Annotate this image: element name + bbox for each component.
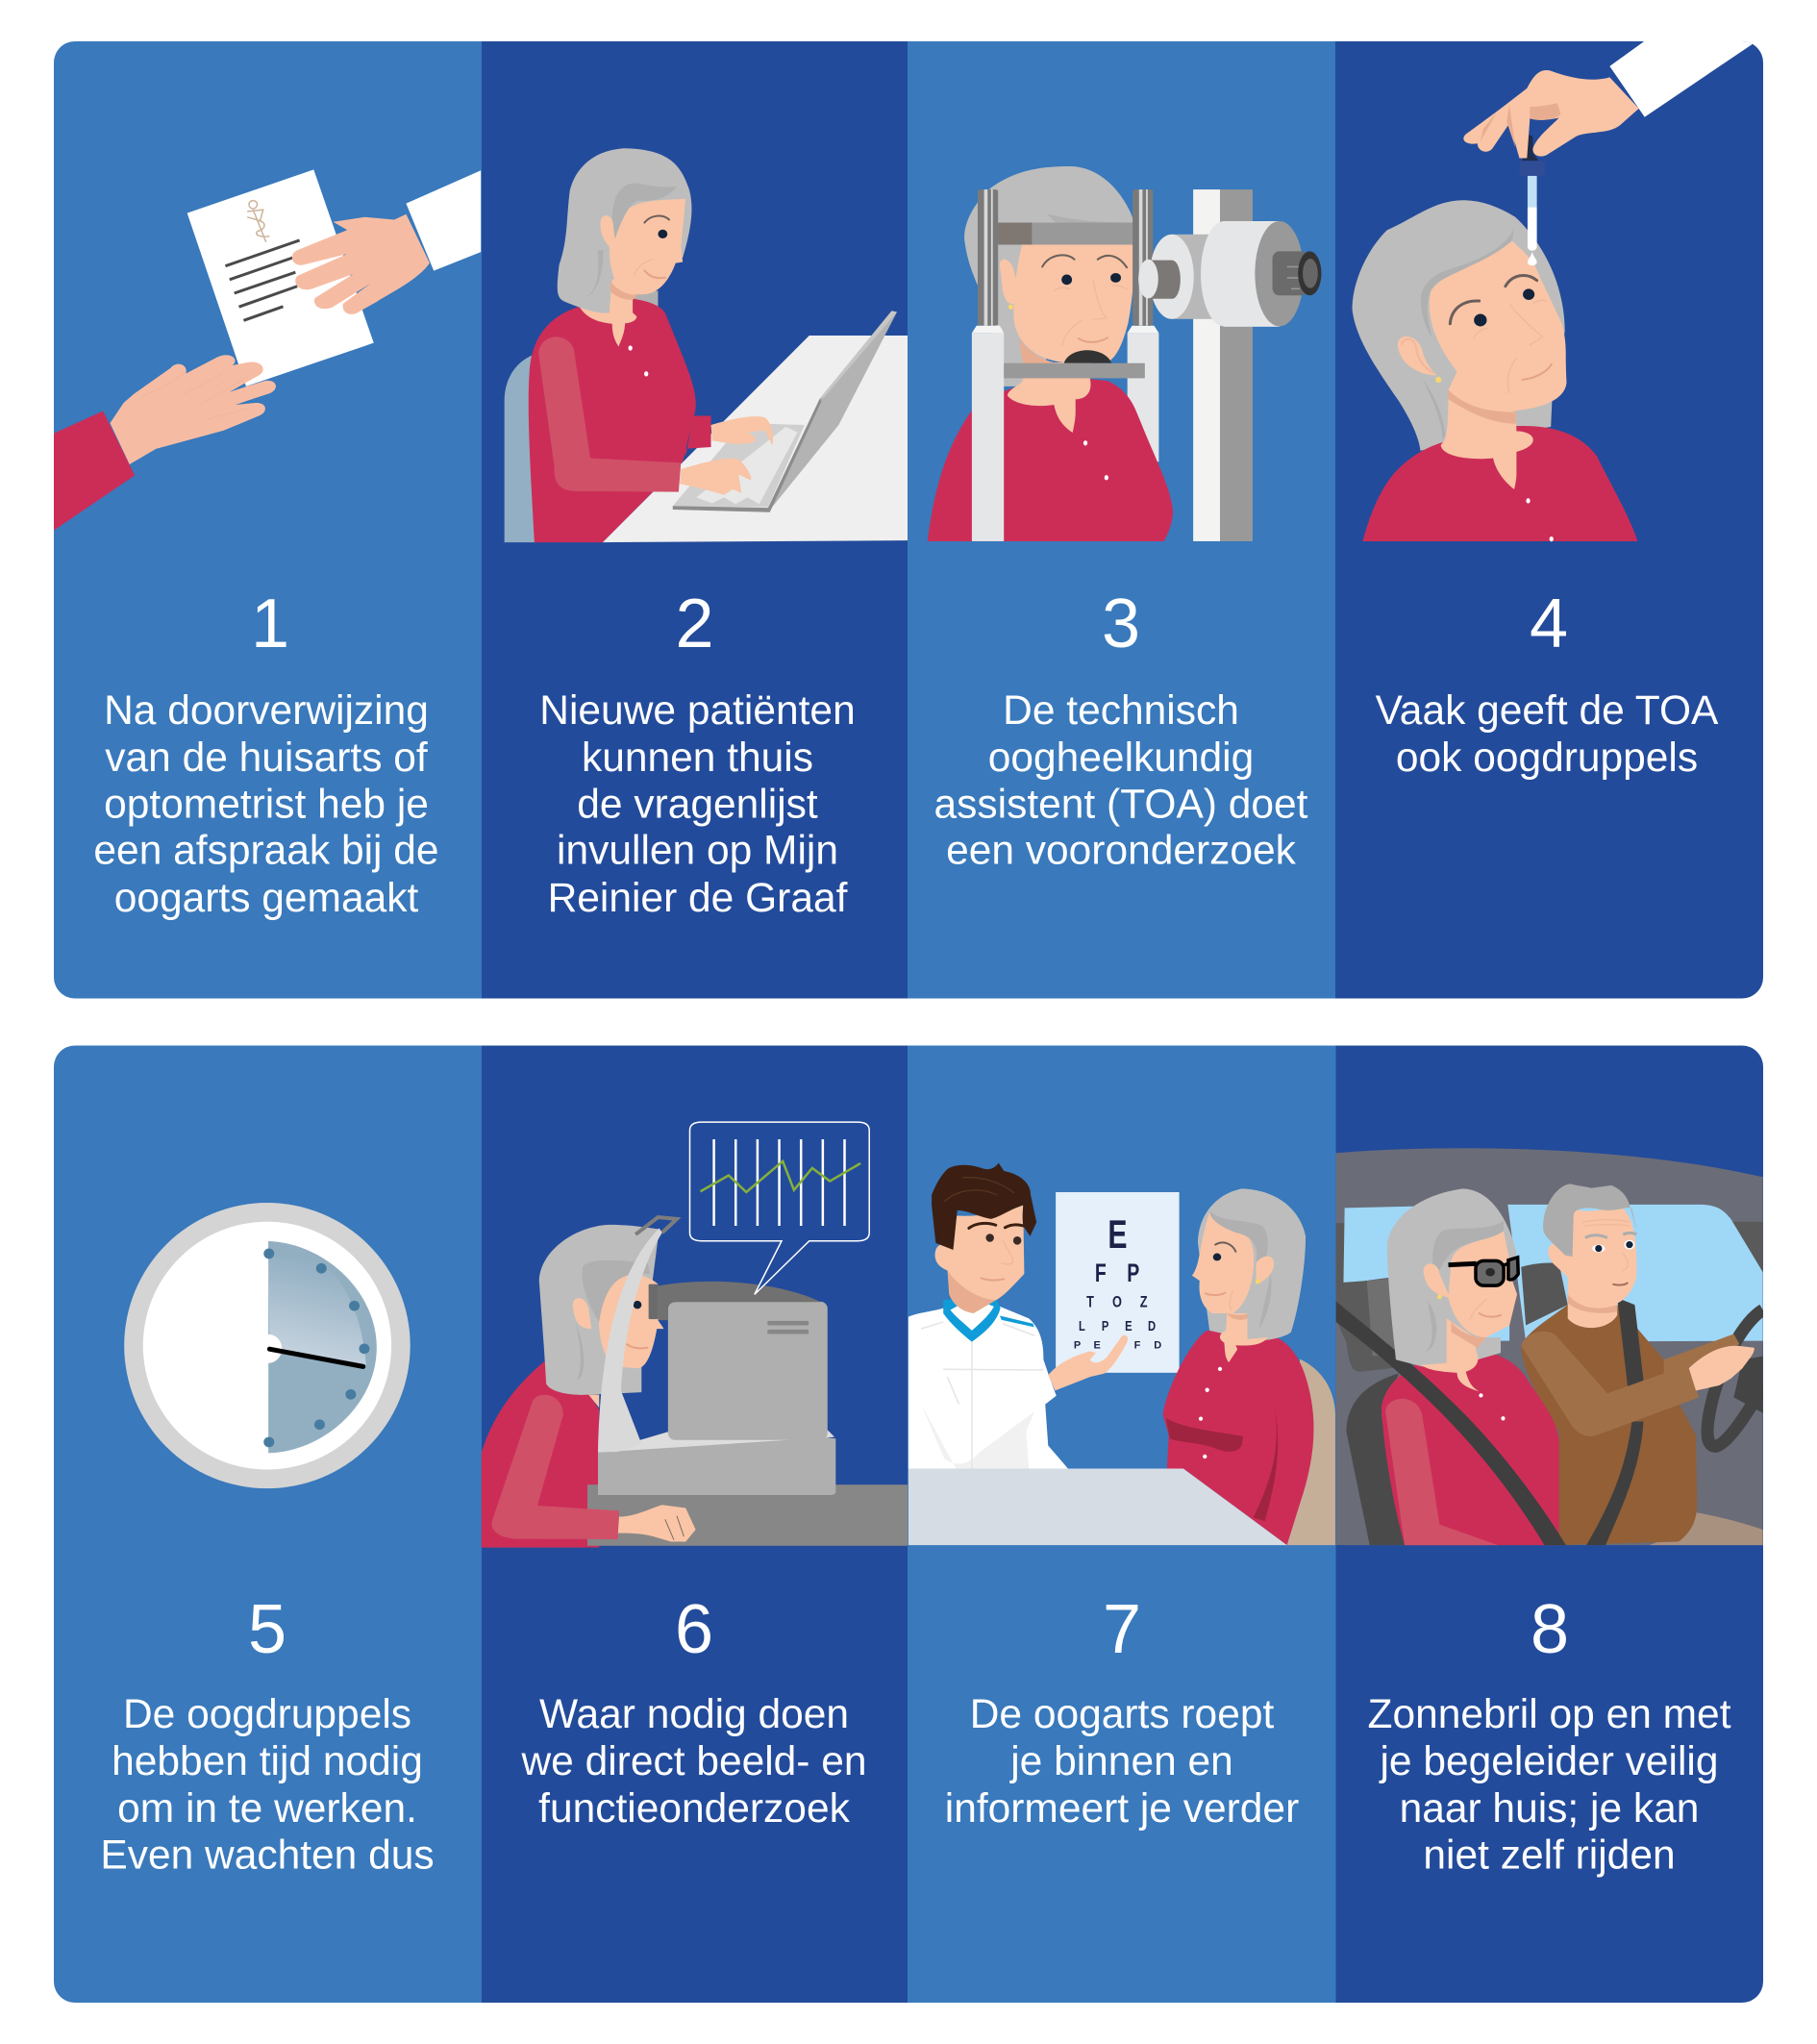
panel: step 3: [908, 41, 1335, 999]
panel: step 1: [54, 41, 482, 999]
eye chart letters: D: [1154, 1340, 1161, 1352]
step text: oogarts gemaakt: [114, 876, 418, 921]
step text: Reinier de Graaf: [548, 876, 848, 921]
step text: een afspraak bij de: [93, 829, 439, 873]
step text: Vaak geeft de TOA: [1376, 688, 1719, 734]
eye chart letters: Z: [1140, 1293, 1147, 1311]
step text: invullen op Mijn: [557, 829, 838, 873]
step text: we direct beeld- en: [520, 1739, 867, 1784]
step text: de vragenlijst: [577, 783, 818, 827]
step number: 3: [1102, 586, 1140, 662]
step number: 5: [248, 1591, 286, 1668]
illustration: couple driving home in car: [1336, 1148, 1763, 1545]
eye chart letters: F: [1134, 1340, 1141, 1352]
icon: wall clock with half shaded: [124, 1203, 411, 1488]
step number: 1: [251, 586, 289, 662]
illustration: eye drops being given: [1353, 37, 1760, 541]
step text: De oogdruppels: [123, 1692, 411, 1737]
step number: 8: [1531, 1591, 1569, 1668]
step text: je begeleider veilig: [1378, 1739, 1719, 1784]
step text: functieonderzoek: [538, 1786, 851, 1832]
illustration: woman at examination device with speech bubble: [482, 1122, 908, 1548]
step text: een vooronderzoek: [946, 829, 1297, 873]
eye chart letters: T: [1086, 1293, 1095, 1311]
step text: om in te werken.: [117, 1786, 417, 1832]
step text: naar huis; je kan: [1400, 1786, 1699, 1832]
step number: 7: [1103, 1591, 1141, 1668]
step text: Zonnebril op en met: [1367, 1692, 1731, 1737]
illustration: doctor with eye chart and patient: [908, 1163, 1335, 1545]
panel: step 7: [908, 1045, 1336, 2003]
eye chart letters: E: [1108, 1211, 1127, 1257]
step number: 2: [675, 586, 714, 662]
step text: kunnen thuis: [582, 735, 813, 781]
step text: De oogarts roept: [970, 1692, 1274, 1737]
step text: hebben tijd nodig: [112, 1739, 423, 1784]
step text: informeert je verder: [945, 1786, 1299, 1832]
illustration: woman at laptop: [505, 148, 908, 542]
step text: ook oogdruppels: [1396, 735, 1698, 781]
eye chart letters: P: [1102, 1317, 1108, 1334]
step text: Waar nodig doen: [539, 1692, 849, 1737]
eye chart letters: P: [1074, 1340, 1081, 1352]
eye chart letters: D: [1148, 1317, 1156, 1334]
panel: step 4: [1335, 37, 1763, 999]
panel: step 8: [1336, 1045, 1763, 2003]
top row of steps: [54, 37, 1763, 999]
doctor's hand: [1048, 1335, 1128, 1390]
bottom row of steps: [54, 1045, 1763, 2003]
speech bubble chart: [689, 1122, 869, 1294]
eye chart letters: E: [1125, 1317, 1133, 1334]
step text: van de huisarts of: [105, 735, 428, 781]
eye chart letters: [1074, 1211, 1161, 1352]
step text: Na doorverwijzing: [104, 688, 429, 734]
step text: De technisch: [1003, 688, 1239, 734]
step text: oogheelkundig: [988, 735, 1254, 781]
step text: Even wachten dus: [100, 1832, 435, 1879]
panel: step 5: [54, 1045, 482, 2003]
eye chart letters: L: [1079, 1317, 1085, 1334]
step text: niet zelf rijden: [1423, 1832, 1676, 1879]
step number: 4: [1530, 586, 1568, 662]
step text: optometrist heb je: [104, 783, 429, 827]
step text: assistent (TOA) doet: [934, 783, 1308, 827]
eye chart letters: E: [1094, 1340, 1101, 1352]
panel: step 6: [482, 1045, 908, 2003]
eye chart letters: P: [1127, 1259, 1139, 1287]
step number: 6: [675, 1591, 713, 1668]
step text: je binnen en: [1008, 1739, 1233, 1784]
step text: Nieuwe patiënten: [539, 688, 856, 734]
eye chart letters: F: [1095, 1259, 1107, 1287]
illustration: hands passing referral letter: [54, 169, 481, 531]
illustration: woman at slit lamp: [928, 166, 1321, 541]
panel: step 2: [482, 41, 908, 999]
eye chart letters: O: [1112, 1293, 1122, 1311]
